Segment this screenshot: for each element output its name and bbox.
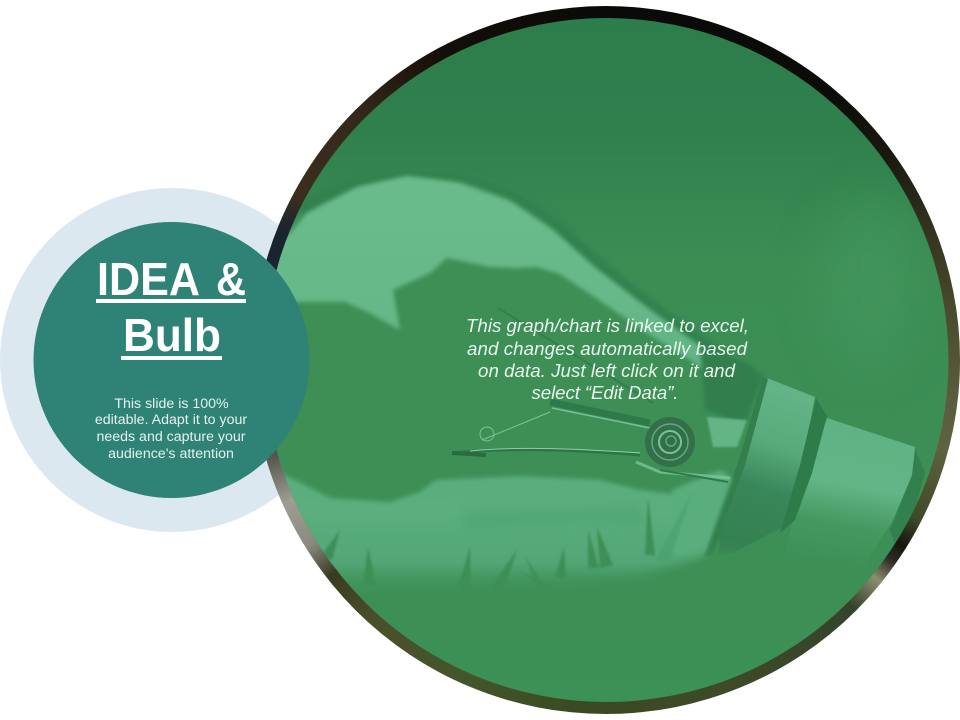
- cloud inner ridge: [488, 514, 632, 517]
- collar: [718, 378, 815, 551]
- description text in teal circle: This slide is 100%: [114, 396, 229, 412]
- title: IDEA & Bulb: IDEA: [97, 253, 200, 305]
- title: IDEA & Bulb: Bulb: [123, 309, 221, 361]
- grass blades: [324, 500, 719, 581]
- neck dark wedge: [698, 346, 760, 420]
- description text in teal circle: editable. Adapt it to your: [95, 412, 247, 428]
- italic caption over photo: and changes automatically based: [467, 338, 748, 359]
- bulb glass interior: [276, 214, 332, 564]
- italic caption over photo: This graph/chart is linked to excel,: [466, 315, 749, 336]
- base cap: [794, 418, 915, 538]
- stem light pieces: [707, 417, 747, 447]
- description text in teal circle: [95, 396, 247, 462]
- collar edge strip: [727, 378, 768, 506]
- teal title circle: [34, 222, 310, 498]
- outer light blue circle: [0, 188, 344, 532]
- italic caption over photo: [466, 315, 749, 403]
- end cap crescent: [890, 449, 925, 545]
- photo ring border: [252, 6, 960, 714]
- description text in teal circle: audience's attention: [108, 446, 234, 462]
- title: IDEA & Bulb: [96, 253, 246, 361]
- italic caption over photo: on data. Just left click on it and: [478, 360, 736, 381]
- reflected lower clouds: [284, 474, 696, 586]
- description text in teal circle: needs and capture your: [96, 429, 246, 445]
- italic caption over photo: select “Edit Data”.: [532, 382, 678, 403]
- dark grass band: [330, 550, 880, 640]
- dark groove band: [780, 398, 827, 533]
- bulb glass dark edge: [300, 170, 722, 352]
- title: IDEA & Bulb: &: [216, 253, 246, 305]
- bulb screw base: [700, 345, 925, 572]
- reflected upper clouds: [276, 174, 704, 370]
- background haze right: [820, 200, 920, 370]
- green photo fill with light bulb: [250, 10, 960, 710]
- filament and stem: [452, 308, 747, 560]
